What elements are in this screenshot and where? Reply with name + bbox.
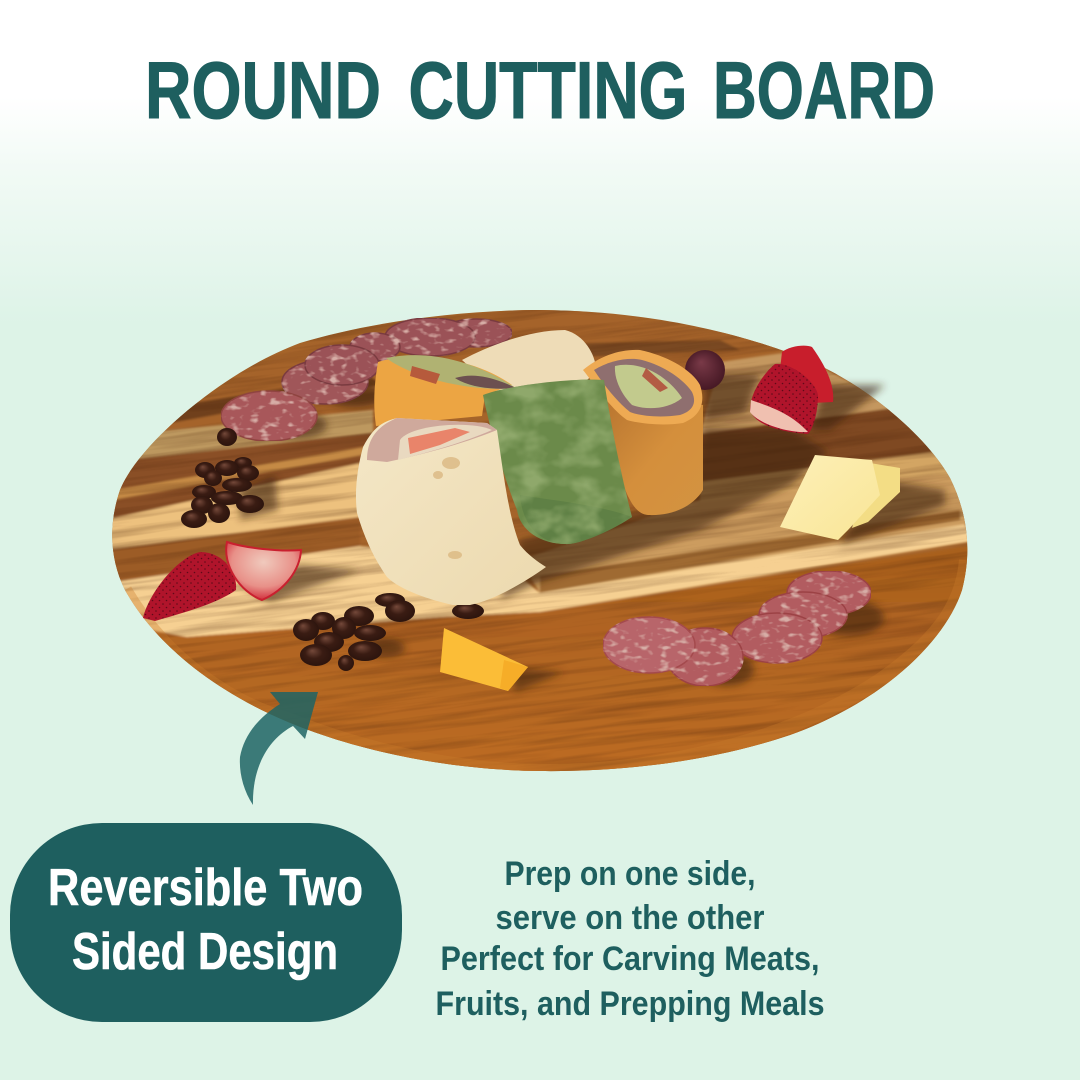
tortilla toast spots <box>433 457 462 559</box>
salami group top left <box>221 318 512 441</box>
light band left <box>105 463 360 550</box>
chocolate beans top left <box>181 428 264 528</box>
title <box>145 46 935 136</box>
filling <box>386 355 516 389</box>
brown band left <box>105 517 360 582</box>
title: ROUND <box>145 46 381 136</box>
description text: Fruits, and Prepping Meals <box>436 985 824 1023</box>
base wood <box>100 300 980 780</box>
tan band right of wraps <box>520 470 980 593</box>
upper right tan band <box>700 352 900 434</box>
title: BOARD <box>713 46 935 136</box>
callout pill <box>10 823 402 1022</box>
cream wrap front <box>356 418 546 605</box>
salami group bottom right <box>603 571 871 686</box>
callout text: Sided Design <box>72 923 338 981</box>
callout text <box>48 859 363 981</box>
dark band right <box>703 408 932 481</box>
description text <box>436 855 824 1023</box>
strawberry cut left <box>226 542 301 600</box>
orange cheese <box>440 628 528 691</box>
right orange wrap <box>583 350 703 515</box>
tan wrap back <box>462 330 596 395</box>
grape <box>685 350 725 390</box>
white cheese wedge <box>780 455 900 540</box>
tan band upper left <box>125 410 373 460</box>
dark band left <box>110 433 373 520</box>
filling <box>367 418 497 462</box>
chocolate beans bottom <box>293 593 484 671</box>
round cutting board with food <box>112 310 968 772</box>
food shadows <box>240 375 945 692</box>
top orange-brown band <box>164 310 780 431</box>
description text: serve on the other <box>496 899 764 937</box>
title: CUTTING <box>408 46 688 136</box>
filling <box>594 359 694 416</box>
lower orange wood <box>154 545 968 772</box>
callout text: Reversible Two <box>48 859 363 917</box>
curved arrow pointing to board <box>240 692 318 805</box>
wooden board <box>112 310 968 772</box>
lightest band <box>115 520 980 637</box>
green wrap <box>483 380 632 544</box>
board rim highlight <box>125 560 966 771</box>
orange wrap back left <box>374 355 516 426</box>
description text: Prep on one side, <box>504 855 756 893</box>
strawberries right <box>750 346 833 434</box>
wood grain texture <box>112 310 968 771</box>
strawberry whole left <box>143 552 236 621</box>
description text: Perfect for Carving Meats, <box>440 940 820 978</box>
